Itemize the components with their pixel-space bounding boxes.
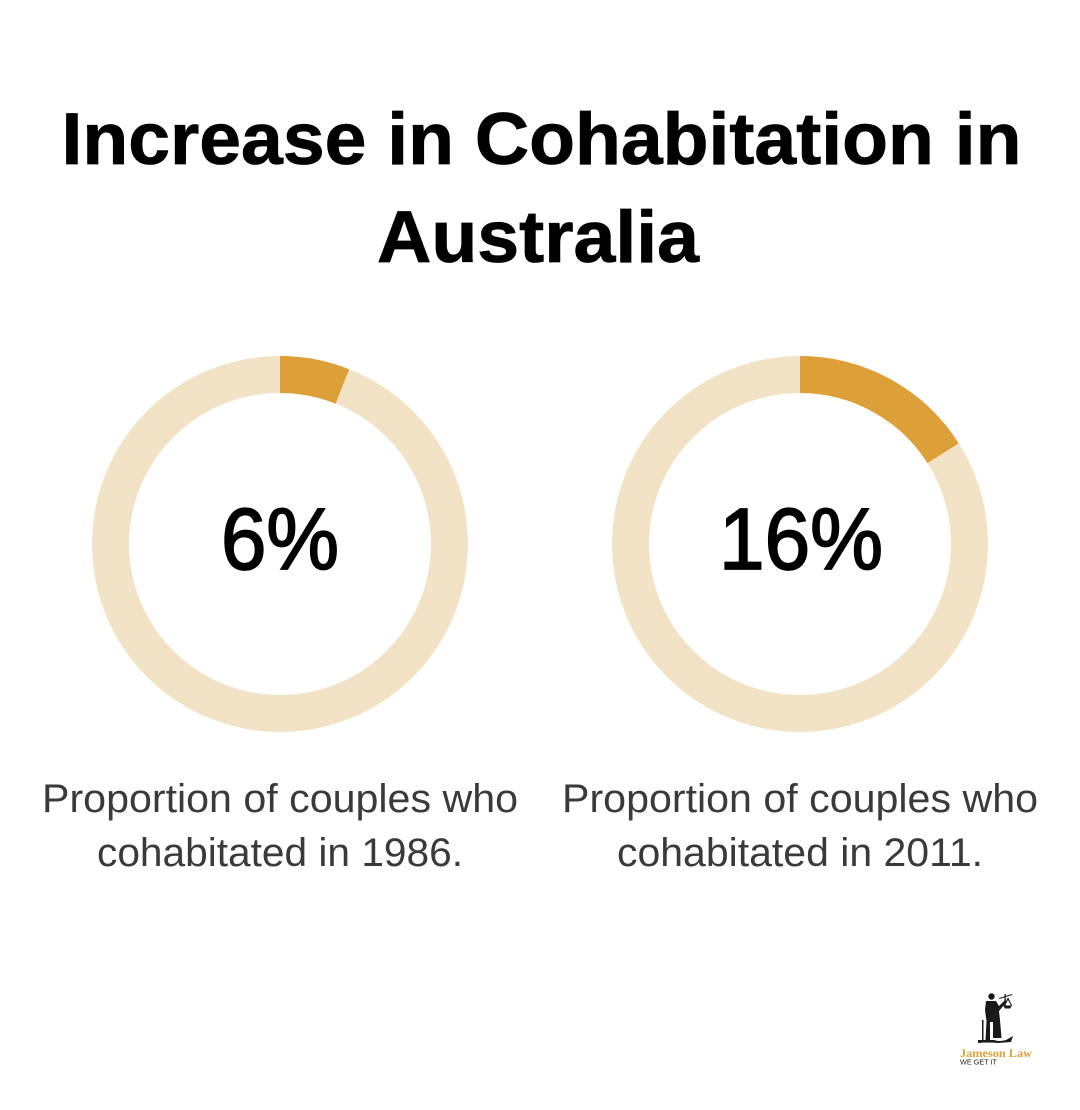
logo tagline: WE GET IT (960, 1060, 998, 1066)
donut chart: 16% (630, 374, 970, 714)
value: 16%: 16% (719, 491, 883, 588)
panel: 2011 statistic (562, 374, 1038, 875)
logo: Jameson Law (960, 993, 1033, 1066)
caption: 2011: cohabitated in 2011. (617, 831, 983, 875)
title: Increase in Cohabitation in (62, 99, 1021, 180)
caption: 2011: Proportion of couples who (562, 777, 1038, 821)
icon: figure of justice (978, 993, 1013, 1043)
logo name: Jameson Law (960, 1048, 1033, 1060)
caption: 2011 (562, 777, 1038, 875)
value: 6%: 6% (221, 491, 339, 588)
caption: 1986: Proportion of couples who (42, 777, 518, 821)
title (62, 99, 1021, 278)
caption: 1986 (42, 777, 518, 875)
panel: 1986 statistic (42, 374, 518, 875)
donut chart: 6% (110, 374, 450, 714)
caption: 1986: cohabitated in 1986. (97, 831, 463, 875)
title: Australia (377, 197, 700, 278)
